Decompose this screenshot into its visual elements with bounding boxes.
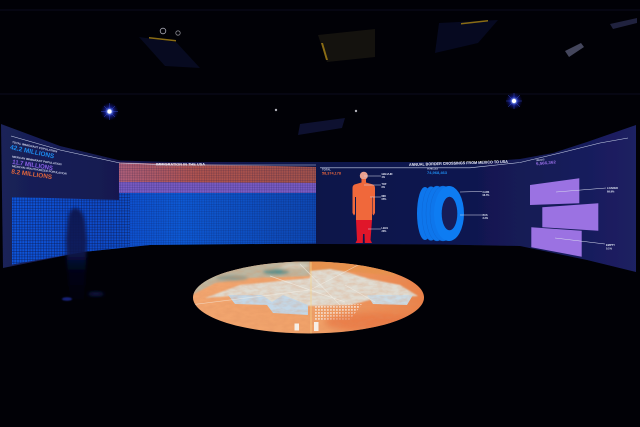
grid: unauthorized red — [119, 162, 316, 183]
icon: human figure — [352, 172, 375, 243]
figure callouts: MID — [382, 195, 386, 198]
stat: vehicles total — [427, 168, 448, 175]
tyre callouts: BUS — [482, 214, 488, 217]
map: mottled texture — [194, 262, 416, 333]
grid: total immigrants blue — [12, 193, 316, 264]
map: teal vegetation — [216, 264, 310, 280]
figure callouts: LEGS — [382, 227, 388, 230]
truck bar: bottom — [531, 227, 582, 257]
tyre callouts — [460, 191, 490, 220]
panel: trucks — [530, 157, 618, 257]
stat: total immigrant population: 42.2 MILLIONS — [9, 144, 55, 160]
map: darker orange lower right — [325, 313, 415, 331]
tyre callouts: 3.3% — [482, 217, 489, 220]
figure callouts: TOP — [382, 183, 387, 186]
stat: mexican immigrant population: 11.7 MILLIONS — [12, 159, 53, 172]
tyre callouts: CARS — [482, 191, 490, 194]
projector light left — [100, 102, 118, 120]
truck bar: middle — [542, 203, 598, 231]
heading line left — [11, 136, 316, 165]
truck callouts: 69.9% — [607, 190, 615, 194]
heading: annual border crossings: ANNUAL BORDER CROSSINGS FROM MEXICO TO USA — [409, 159, 508, 167]
figure callouts: 4% — [382, 176, 386, 179]
truck callouts: LOADED — [607, 186, 618, 190]
icon: tyre — [417, 186, 464, 241]
stat: mexican immigrant population: MEXICAN IMMIGRANT POPULATION — [12, 155, 62, 166]
stat: trucks total — [535, 157, 557, 166]
panel: pedestrians — [322, 168, 393, 243]
stat: pedestrians total — [322, 168, 342, 176]
stat: mexican unauthorized population: MEXICAN UNAUTHORIZED POPULATION — [12, 164, 67, 176]
truck callouts: 0.1% — [606, 246, 613, 250]
figure callouts: 65% — [382, 198, 387, 201]
map: roads — [190, 264, 375, 305]
visitor silhouette — [62, 208, 104, 301]
stat: total immigrant population: TOTAL IMMIGRANT POPULATION — [12, 140, 58, 154]
tyre callouts: 96.7% — [482, 194, 490, 197]
map: blue patch left — [228, 295, 308, 315]
map: blue patch right — [367, 295, 413, 305]
stat: vehicles total: VEHICLES — [427, 168, 438, 170]
panel: vehicles — [417, 168, 490, 241]
map: hatch grid — [315, 304, 362, 320]
figure callouts — [364, 173, 393, 233]
stat: pedestrians total: 58,374,178 — [322, 170, 342, 176]
curved screen — [1, 124, 636, 272]
ceiling rig — [0, 10, 640, 135]
panel: immigration grid chart — [12, 162, 316, 264]
truck callouts — [555, 186, 618, 250]
figure callouts: 8% — [382, 186, 386, 189]
heading line right — [320, 138, 628, 168]
map: bottom label left — [294, 324, 299, 330]
map: upper terrain — [193, 262, 310, 295]
stat: pedestrians total: TOTAL — [322, 168, 332, 171]
stat: trucks total: TRUCKS — [535, 158, 545, 162]
stat: vehicles total: 74,968,463 — [427, 170, 448, 175]
figure callouts: HEAD — [382, 173, 393, 176]
heading: immigration in the usa: IMMIGRATION IN THE USA — [156, 162, 205, 166]
projector light right — [506, 92, 522, 110]
map: center line — [310, 262, 312, 334]
map: upper orange terrain — [309, 262, 396, 274]
truck callouts: EMPTY — [606, 243, 615, 247]
stat: trucks total: 5,566,362 — [536, 159, 557, 166]
stat: mexican unauthorized population: 8.2 MILLIONS — [11, 168, 52, 181]
grid: mexican purple — [119, 182, 316, 193]
truck bar: top — [530, 178, 579, 205]
stat: mexican unauthorized population — [11, 164, 67, 183]
map: bottom label right — [314, 322, 318, 331]
exhibition scene — [0, 10, 640, 334]
figure callouts: 23% — [382, 230, 387, 233]
map: pale central region — [205, 269, 418, 306]
stat: mexican immigrant population — [11, 155, 62, 173]
floor map disc — [193, 262, 424, 334]
